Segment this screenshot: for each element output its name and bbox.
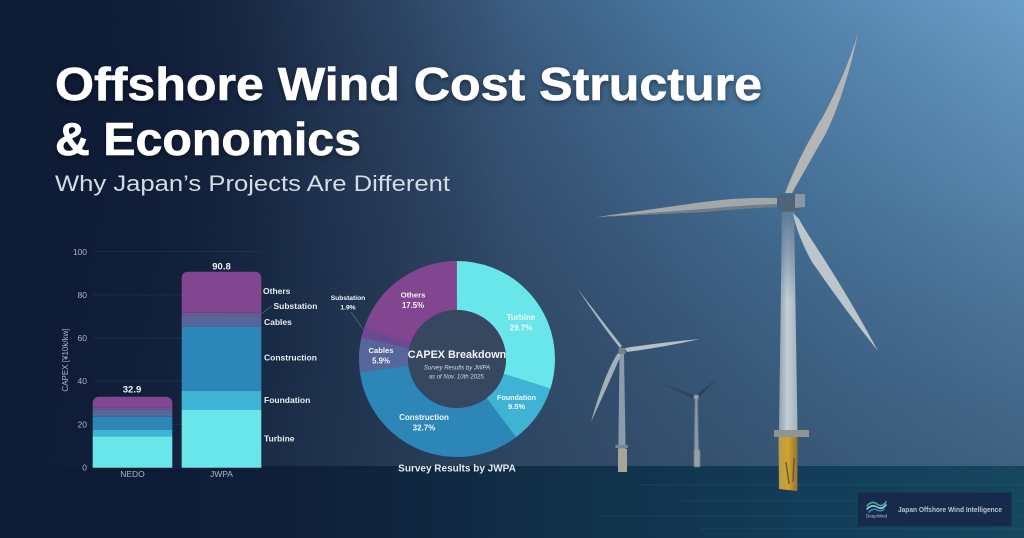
y axis title: CAPEX [¥10k/kw] <box>61 328 70 392</box>
bar totals: 32.9 <box>123 384 141 396</box>
donut centre text: as of Nov. 10th 2025. <box>429 374 485 380</box>
brand badge <box>858 492 1012 526</box>
donut centre text: Survey Results by JWPA <box>424 366 490 372</box>
grid lines and y axis ticks: 60 <box>78 333 87 343</box>
sea <box>0 466 1024 538</box>
segment labels: 29.7% <box>510 324 532 332</box>
distant turbine <box>660 378 718 467</box>
donut centre text <box>408 349 506 380</box>
main turbine <box>597 33 878 491</box>
upper blade <box>785 33 858 193</box>
bar: NEDO <box>93 397 172 468</box>
x axis labels: JWPA <box>210 469 233 479</box>
logo wordmark: DeepWind <box>866 514 887 518</box>
segment labels: 1.9% <box>340 304 356 312</box>
segment labels <box>263 286 317 444</box>
icon: waves logo <box>867 502 886 512</box>
segment labels: 9.5% <box>508 402 525 411</box>
segment labels: Cables <box>264 317 292 327</box>
grid lines and y axis ticks: 40 <box>78 376 87 386</box>
subtitle: Why Japan’s Projects Are Different <box>55 171 450 196</box>
substation leader line <box>351 312 363 329</box>
grid lines and y axis ticks: 80 <box>78 290 87 300</box>
segment labels: Substation <box>274 301 317 311</box>
segment labels: 17.5% <box>402 301 424 310</box>
segment labels: Cables <box>369 346 393 355</box>
tower <box>779 210 798 432</box>
left blade <box>597 198 777 217</box>
title <box>55 58 762 165</box>
title: & Economics <box>55 113 361 165</box>
donut chart <box>331 256 560 474</box>
grid lines and y axis ticks <box>73 247 262 472</box>
segment labels: Foundation <box>264 395 310 405</box>
segment labels: Substation <box>331 295 365 302</box>
donut caption: Survey Results by JWPA <box>398 464 516 474</box>
segment labels: Construction <box>399 413 449 422</box>
x axis labels: NEDO <box>120 469 145 479</box>
yellow transition piece <box>778 437 798 491</box>
grid lines and y axis ticks: 20 <box>78 420 87 430</box>
segment labels: 5.9% <box>372 356 390 366</box>
bar totals <box>123 262 231 396</box>
segment labels: Turbine <box>507 313 536 322</box>
segment labels: Others <box>401 290 425 300</box>
segment labels: 32.7% <box>413 424 435 432</box>
middle turbine <box>577 288 700 472</box>
bar: JWPA <box>182 272 261 468</box>
donut centre text: CAPEX Breakdown <box>408 349 506 361</box>
segment labels: Others <box>263 286 291 296</box>
segment labels: Turbine <box>264 434 295 444</box>
stacked bar chart <box>61 247 317 479</box>
donut segments <box>354 256 560 462</box>
grid lines and y axis ticks: 0 <box>82 462 87 472</box>
segment labels <box>331 290 536 432</box>
lower right blade <box>793 213 878 351</box>
bar totals: 90.8 <box>212 262 231 272</box>
grid lines and y axis ticks: 100 <box>73 247 87 257</box>
segment labels: Foundation <box>497 393 536 402</box>
substation leader line <box>261 306 272 314</box>
platform <box>774 430 809 437</box>
segment labels: Construction <box>264 352 317 362</box>
x axis labels <box>120 469 233 479</box>
badge text: Japan Offshore Wind Intelligence <box>898 507 1002 514</box>
nacelle <box>777 194 805 212</box>
title: Offshore Wind Cost Structure <box>55 58 762 110</box>
donut hole <box>408 310 506 408</box>
